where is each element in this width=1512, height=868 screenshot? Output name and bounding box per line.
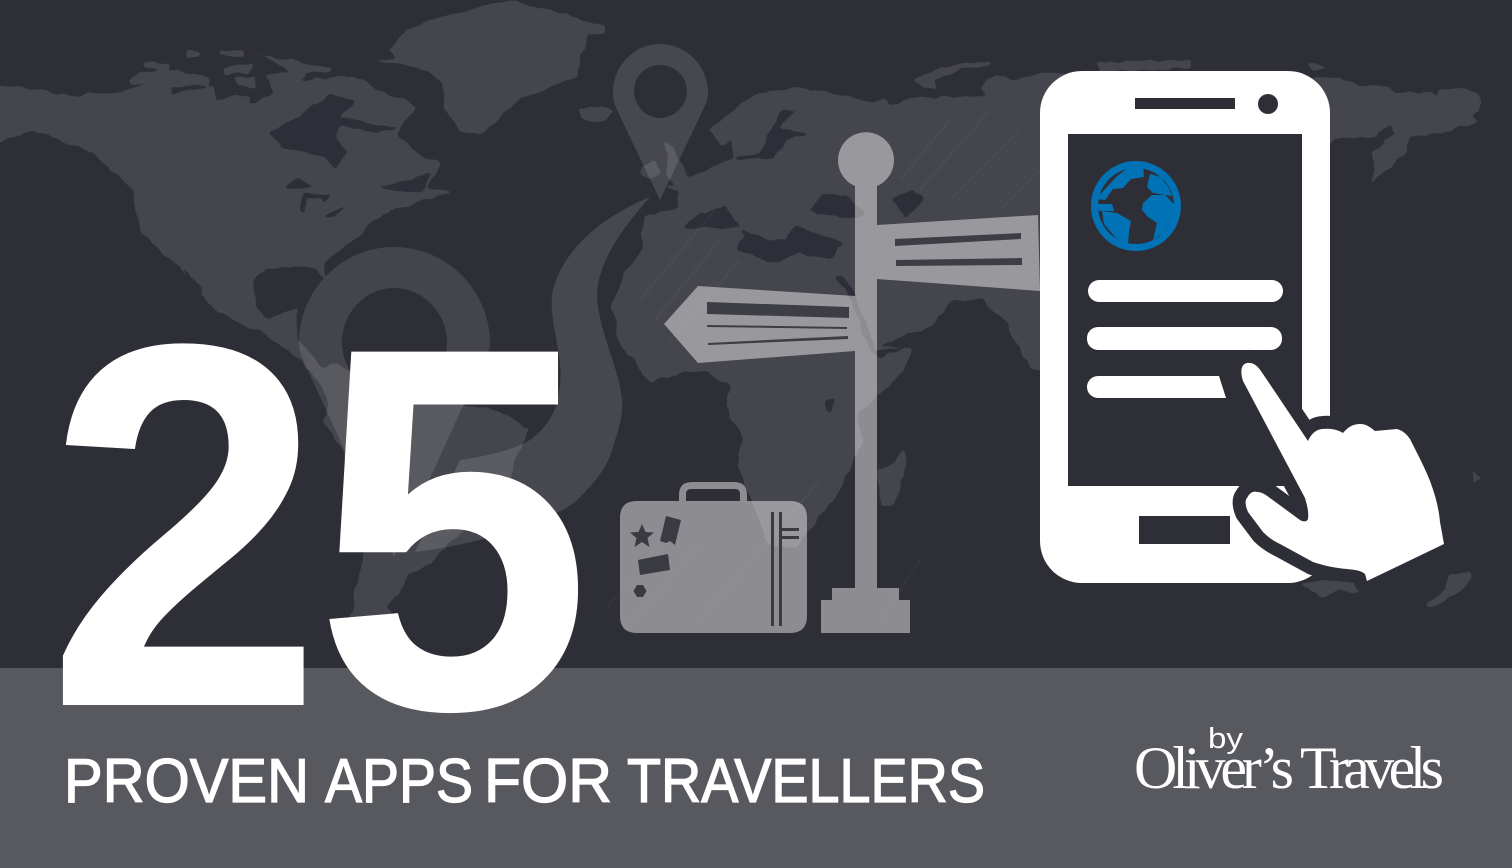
home button bbox=[1139, 516, 1230, 544]
speaker bbox=[1135, 98, 1235, 109]
large location pin bbox=[299, 247, 490, 557]
signpost pole and base bbox=[664, 132, 1040, 633]
Greenland bbox=[368, 0, 606, 135]
small location pin bbox=[613, 44, 708, 200]
sign slats bbox=[707, 233, 1022, 345]
subtitle: FOR bbox=[484, 747, 612, 816]
big number 25: 5 bbox=[314, 239, 580, 818]
Australia and New Zealand fragments bbox=[1300, 470, 1482, 608]
North and Central America bbox=[0, 75, 530, 620]
subtitle bbox=[64, 747, 985, 816]
Britain and Ireland bbox=[640, 140, 693, 187]
Mediterranean Sea bbox=[683, 207, 843, 263]
subtitle: APPS bbox=[325, 747, 473, 816]
logo word by: by bbox=[1208, 723, 1244, 755]
Red Sea and Gulf of Aden bbox=[835, 276, 912, 358]
logo bbox=[1134, 723, 1444, 801]
world map background bbox=[0, 0, 1482, 620]
bottom band bbox=[0, 668, 1512, 868]
Lake Victoria bbox=[826, 398, 835, 412]
Black Sea bbox=[807, 194, 867, 218]
Madagascar bbox=[878, 450, 908, 508]
seas and lakes bbox=[179, 95, 925, 412]
Japan bbox=[1371, 127, 1410, 183]
menu bars bbox=[1087, 280, 1283, 398]
Eurasia and Africa bbox=[612, 73, 1481, 547]
subtitle: PROVEN bbox=[64, 747, 309, 816]
Baltic Sea bbox=[733, 110, 813, 160]
icon: pointing hand bbox=[1241, 363, 1444, 581]
subtitle: TRAVELLERS bbox=[627, 747, 985, 816]
smartphone bbox=[1040, 71, 1330, 583]
Iceland bbox=[577, 106, 615, 122]
suitcase body and handle bbox=[620, 482, 807, 633]
logo wordmark: Oliver’s bbox=[1134, 735, 1294, 801]
big number 25: 2 bbox=[46, 236, 310, 815]
faint hatching bbox=[605, 110, 1110, 630]
suitcase stickers and straps bbox=[630, 512, 799, 626]
Gulf of California bbox=[179, 262, 203, 297]
suitcase bbox=[620, 482, 807, 633]
logo wordmark bbox=[1134, 735, 1444, 801]
winding road bbox=[415, 197, 650, 552]
Novaya Zemlya and northern islands bbox=[913, 60, 1327, 90]
Caspian Sea bbox=[890, 191, 925, 218]
logo wordmark: Travels bbox=[1300, 735, 1444, 801]
signpost bbox=[664, 132, 1040, 633]
Hudson Bay bbox=[269, 95, 400, 170]
camera bbox=[1258, 94, 1278, 114]
Great Lakes and St Lawrence bbox=[284, 173, 431, 217]
Arctic islands bbox=[128, 50, 330, 102]
phone screen bbox=[1068, 134, 1302, 486]
phone body bbox=[1040, 71, 1330, 583]
icon: blue globe bbox=[1091, 161, 1181, 251]
